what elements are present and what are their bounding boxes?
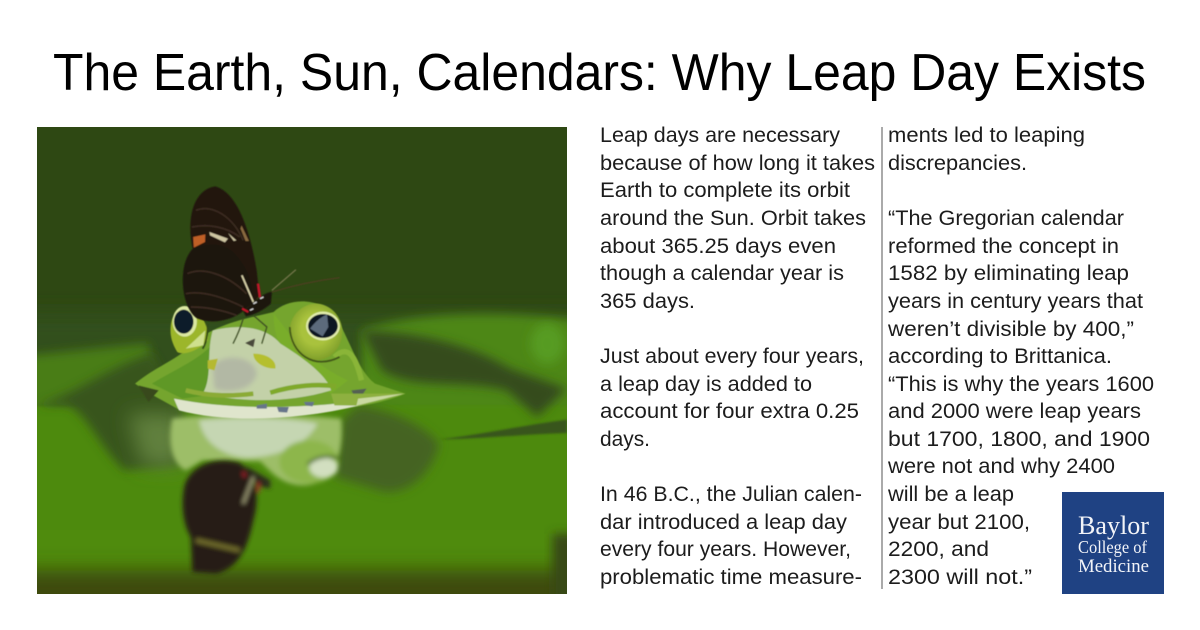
paragraph: every four years: account for four extra 0.25 bbox=[600, 400, 859, 423]
blurred dark surroundings around frog bbox=[37, 330, 567, 492]
divider between text columns bbox=[881, 127, 883, 589]
paragraph: Gregorian calendar quote: 2200, and bbox=[888, 538, 989, 561]
paragraph: Julian calendar: every four years. However, bbox=[600, 538, 851, 561]
soft background bands bbox=[37, 308, 567, 594]
butterfly reflection bbox=[183, 461, 270, 574]
paragraph: Gregorian calendar quote: but 1700, 1800, and 1900 bbox=[888, 428, 1150, 451]
paragraph: Gregorian calendar quote: 1582 by eliminating leap bbox=[888, 262, 1129, 285]
text column 2 bbox=[887, 124, 1154, 589]
paragraph: Gregorian calendar quote: were not and why 2400 bbox=[887, 455, 1115, 478]
paragraph: every four years: a leap day is added to bbox=[600, 373, 812, 396]
paragraph: Gregorian calendar quote: years in century years that bbox=[888, 290, 1143, 313]
paragraph: Julian calendar: In 46 B.C., the Julian calen- bbox=[600, 483, 862, 506]
paragraph: why leap days are necessary bbox=[600, 124, 875, 313]
paragraph: Gregorian calendar quote bbox=[887, 207, 1154, 589]
paragraph: why leap days are necessary: Leap days are necessary bbox=[600, 124, 841, 147]
paragraph: Gregorian calendar quote: according to Brittanica. bbox=[888, 345, 1112, 368]
paragraph: Julian calendar bbox=[600, 483, 862, 589]
paragraph: Gregorian calendar quote: reformed the concept in bbox=[888, 235, 1119, 258]
paragraph: why leap days are necessary: because of how long it takes bbox=[600, 152, 875, 175]
logo: Baylor College of Medicine bbox=[1062, 492, 1164, 594]
logo: Baylor College of Medicine: Medicine bbox=[1078, 556, 1149, 577]
paragraph: Gregorian calendar quote: year but 2100, bbox=[888, 511, 1030, 534]
frog eyes bbox=[171, 304, 342, 362]
paragraph: every four years bbox=[600, 345, 864, 451]
title: The Earth, Sun, Calendars: Why Leap Day Exists bbox=[53, 44, 1146, 102]
paragraph: Gregorian calendar quote: will be a leap bbox=[887, 483, 1014, 506]
paragraph: Gregorian calendar quote: “This is why the years 1600 bbox=[888, 373, 1154, 396]
paragraph: why leap days are necessary: about 365.25 days even bbox=[600, 235, 836, 258]
paragraph: Gregorian calendar quote: “The Gregorian calendar bbox=[888, 207, 1124, 230]
paragraph: why leap days are necessary: though a calendar year is bbox=[600, 262, 844, 285]
logo: Baylor College of Medicine: College of bbox=[1078, 537, 1147, 557]
photo: frog with butterfly on its head bbox=[37, 127, 567, 594]
paragraph: why leap days are necessary: 365 days. bbox=[600, 290, 695, 313]
frog head bbox=[135, 301, 405, 419]
paragraph: discrepancies bbox=[888, 124, 1085, 175]
paragraph: Gregorian calendar quote: weren’t divisible by 400,” bbox=[887, 318, 1134, 341]
paragraph: discrepancies: ments led to leaping bbox=[888, 124, 1085, 147]
paragraph: why leap days are necessary: Earth to complete its orbit bbox=[600, 179, 850, 202]
paragraph: Gregorian calendar quote: 2300 will not.” bbox=[888, 566, 1032, 589]
paragraph: why leap days are necessary: around the Sun. Orbit takes bbox=[600, 207, 866, 230]
butterfly bbox=[183, 186, 340, 347]
paragraph: Gregorian calendar quote: and 2000 were leap years bbox=[888, 400, 1141, 423]
paragraph: discrepancies: discrepancies. bbox=[888, 152, 1027, 175]
logo: Baylor College of Medicine: Baylor bbox=[1078, 511, 1149, 540]
paragraph: Julian calendar: dar introduced a leap day bbox=[600, 511, 848, 534]
paragraph: every four years: days. bbox=[600, 428, 650, 451]
text column 1 bbox=[600, 124, 875, 589]
paragraph: Julian calendar: problematic time measure- bbox=[600, 566, 862, 589]
paragraph: every four years: Just about every four years, bbox=[600, 345, 864, 368]
frog reflection bbox=[170, 415, 342, 485]
